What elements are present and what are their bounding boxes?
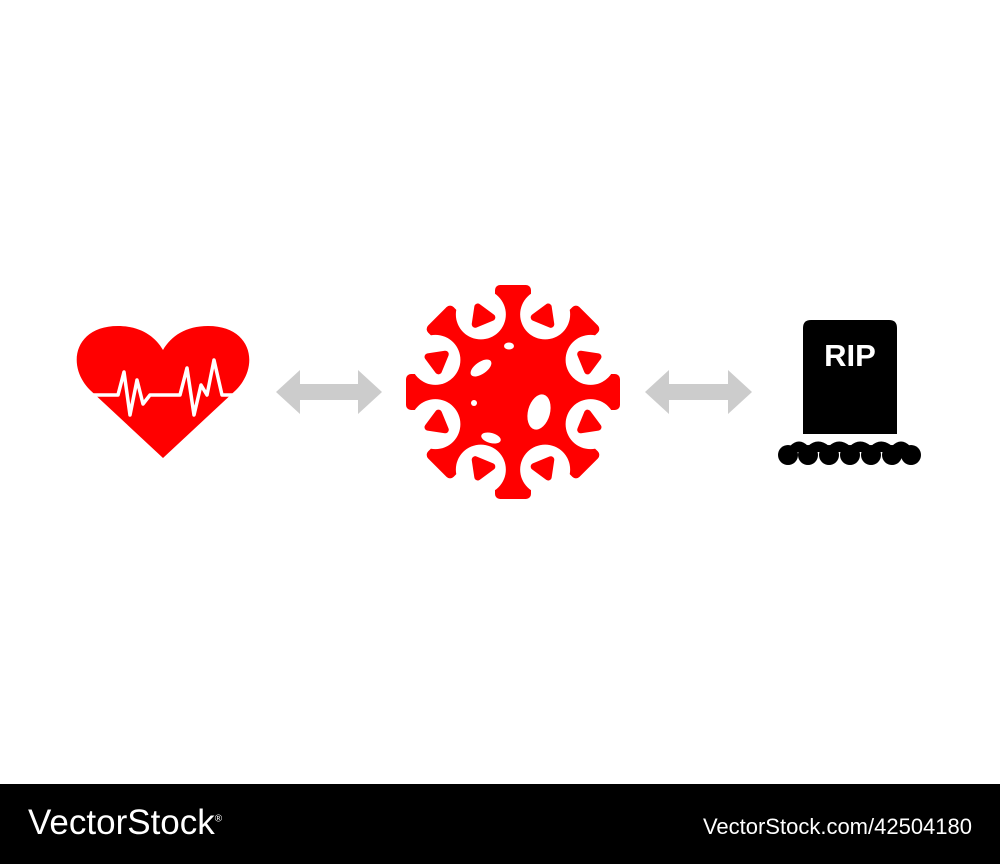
- arrow: left double arrow: [276, 370, 382, 414]
- footer bar: [0, 784, 1000, 864]
- footer brand: VectorStock®: [28, 803, 222, 842]
- arrow: right double arrow: [645, 370, 752, 414]
- icon: tombstone RIP: RIP: [824, 338, 876, 373]
- footer id: VectorStock.com/42504180: [703, 814, 972, 839]
- icon: virus: [367, 246, 659, 538]
- icon: tombstone RIP: [778, 320, 921, 465]
- icon: heart with pulse: [77, 326, 249, 458]
